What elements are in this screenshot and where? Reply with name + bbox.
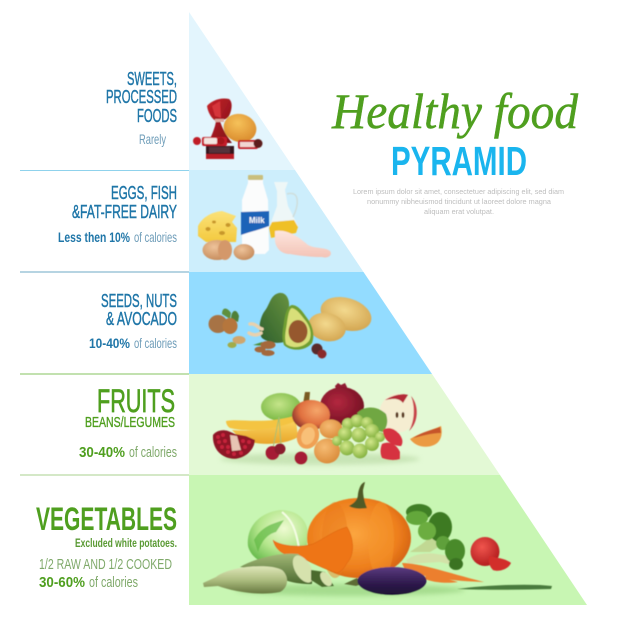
icon: peach slice bbox=[410, 426, 442, 447]
label: sweets: FOODS bbox=[137, 106, 177, 126]
icon: cashews bbox=[249, 324, 262, 335]
icon: cheese bbox=[198, 211, 237, 242]
icon: cherries bbox=[266, 417, 308, 464]
icon: pistachios bbox=[228, 336, 246, 348]
heading: PYRAMID: PYRAMID bbox=[391, 138, 527, 184]
label: eggs, fish and dairy bbox=[58, 183, 177, 245]
description text: nonummy nibheuismod tincidunt ut laoreet dolore magna bbox=[367, 197, 552, 206]
label: sweets: SWEETS, bbox=[127, 69, 177, 89]
pyramid tier: vegetables bbox=[189, 475, 587, 605]
icon: cabbage bbox=[248, 510, 308, 563]
label: eggs, fish and dairy: &FAT-FREE DAIRY bbox=[72, 202, 177, 222]
title bbox=[331, 83, 579, 216]
label: vegetables: VEGETABLES bbox=[36, 501, 177, 537]
icon: wrapped candies bbox=[193, 137, 262, 149]
tier divider lines bbox=[20, 170, 189, 475]
label: sweets: PROCESSED bbox=[106, 87, 177, 107]
icon: oil jug bbox=[269, 182, 298, 238]
icon: grapes bbox=[332, 414, 385, 458]
icon: green apple bbox=[261, 393, 301, 421]
icon: avocado half bbox=[282, 305, 313, 350]
label: vegetables bbox=[36, 501, 177, 591]
label: seeds, nuts and avocado: 10-40% bbox=[89, 335, 130, 351]
icon: whole avocado bbox=[260, 293, 292, 343]
fruit shadow bbox=[220, 453, 420, 465]
label: seeds, nuts and avocado: SEEDS, NUTS bbox=[101, 291, 177, 311]
icon: strawberries bbox=[380, 428, 402, 460]
illustration: fruits bbox=[213, 383, 442, 465]
label: eggs, fish and dairy: EGGS, FISH bbox=[111, 183, 177, 203]
pyramid tier: sweets bbox=[189, 12, 295, 170]
label: seeds, nuts and avocado bbox=[89, 291, 177, 351]
label: sweets bbox=[106, 69, 177, 147]
pyramid tier: fruits bbox=[189, 374, 500, 475]
description text: aliquam erat volutpat. bbox=[424, 207, 494, 216]
icon: pumpkin bbox=[307, 482, 411, 578]
icon: tomato bbox=[470, 537, 511, 571]
label: sweets: Rarely bbox=[139, 131, 166, 147]
label: fruits: of calories bbox=[129, 444, 177, 461]
pyramid tier: seeds bbox=[189, 272, 432, 374]
pyramid bbox=[189, 12, 587, 605]
icon: apple half bbox=[380, 394, 417, 432]
label: vegetables: 1/2 RAW AND 1/2 COOKED bbox=[39, 556, 172, 573]
label: eggs, fish and dairy: Less then 10% bbox=[58, 229, 130, 245]
icon: peach bbox=[292, 400, 330, 430]
description text: Lorem ipsum dolor sit amet, consectetuer adipiscing elit, sed diam bbox=[353, 187, 564, 196]
description text bbox=[353, 187, 564, 216]
label: seeds, nuts and avocado: of calories bbox=[134, 335, 177, 351]
icon: eggs bbox=[202, 240, 254, 260]
label: fruits: 30-40% bbox=[79, 444, 125, 461]
soft ground shadow bbox=[235, 584, 465, 596]
label: vegetables: Excluded white potatoes. bbox=[75, 536, 177, 550]
icon: potatoes bbox=[305, 291, 375, 345]
icon: broccoli bbox=[406, 504, 465, 570]
icon: pomegranate bbox=[320, 383, 364, 425]
illustration: nuts and avocado bbox=[208, 291, 375, 358]
icon: chocolate bar bbox=[206, 146, 234, 159]
icon: pumpkin slice bbox=[273, 527, 353, 573]
icon: chicken leg bbox=[275, 231, 331, 258]
icon: green onion bbox=[457, 585, 552, 590]
label: vegetables: of calories bbox=[89, 574, 138, 591]
heading: Healthy food: Healthy food bbox=[331, 83, 579, 139]
icon: apricots bbox=[293, 420, 342, 464]
label: seeds, nuts and avocado: & AVOCADO bbox=[106, 309, 177, 329]
illustration: dairy bbox=[198, 175, 331, 260]
icon: leaf bbox=[357, 407, 387, 432]
illustration: vegetables bbox=[203, 482, 552, 596]
icon: red candy bag bbox=[207, 98, 232, 143]
label: vegetables: 30-60% bbox=[39, 574, 85, 591]
icon: hazelnuts bbox=[312, 344, 326, 358]
icon: zucchini bbox=[203, 566, 287, 594]
label: fruits bbox=[79, 383, 177, 461]
icon: cookie bbox=[220, 110, 260, 146]
label: eggs, fish and dairy: of calories bbox=[134, 229, 177, 245]
icon: almonds bbox=[253, 341, 276, 356]
icon: pomegranate half bbox=[213, 430, 255, 459]
illustration: sweets bbox=[193, 98, 262, 159]
icon: walnuts bbox=[208, 309, 239, 334]
icon: zucchini pieces bbox=[240, 552, 334, 588]
icon: carrots bbox=[402, 563, 484, 583]
icon: bananas bbox=[226, 392, 310, 444]
pyramid tier: dairy bbox=[189, 170, 364, 272]
label: fruits: BEANS/LEGUMES bbox=[85, 414, 175, 431]
icon: milk bottle: Milk bbox=[249, 216, 265, 225]
label: fruits: FRUITS bbox=[97, 383, 175, 419]
icon: eggplant bbox=[344, 567, 426, 595]
